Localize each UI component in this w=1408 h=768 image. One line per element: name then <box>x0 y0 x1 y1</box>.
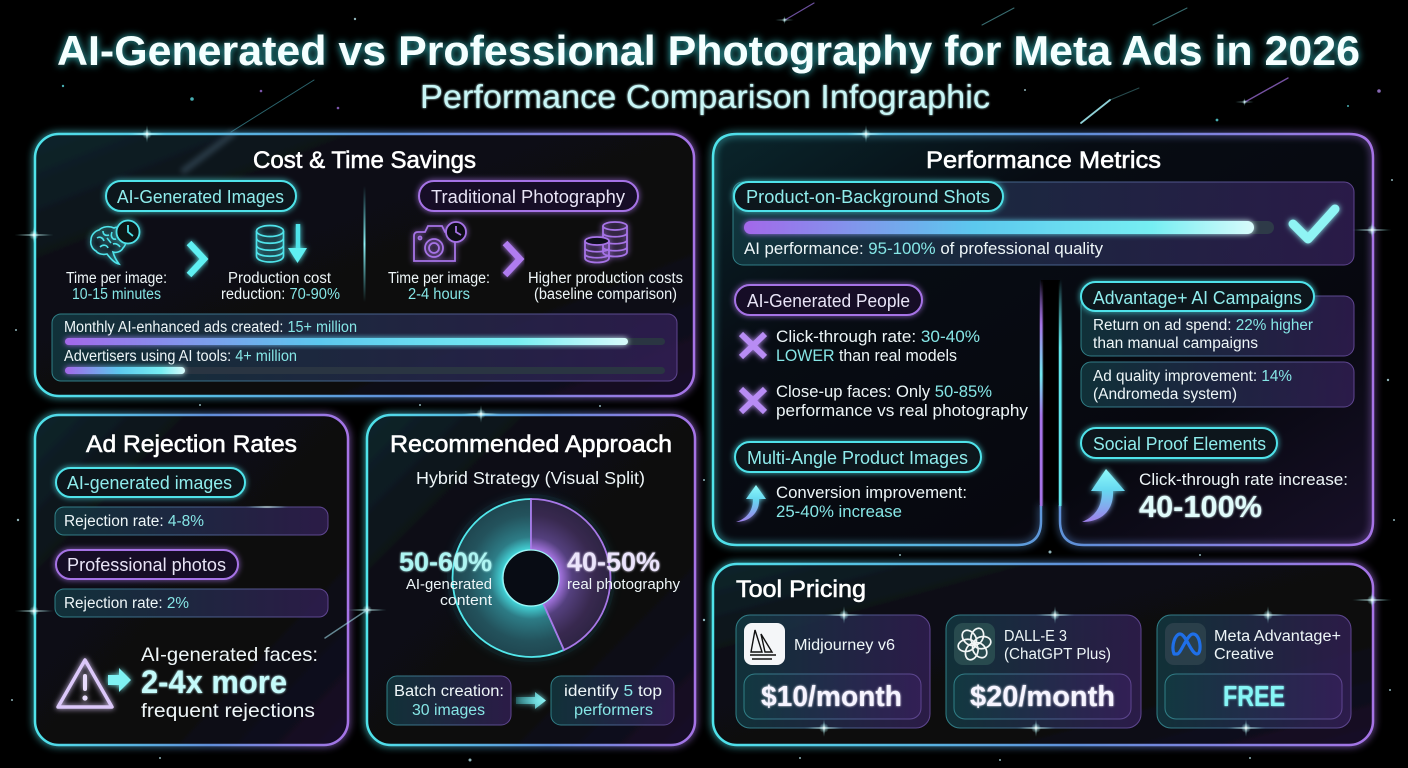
icon: upward curved arrow small <box>736 485 766 522</box>
pill: traditional photography: Traditional Photography <box>431 187 625 207</box>
box: return on ad spend: Return on ad spend: 22% higher <box>1093 317 1313 334</box>
pill: professional photos: Professional photos <box>67 555 226 575</box>
text: production cost reduction <box>221 270 340 303</box>
icon: coins with down arrow <box>256 224 307 263</box>
price: $10/month: $10/month <box>761 681 902 713</box>
pill: multi-angle product images <box>735 442 981 472</box>
text: DALL-E 3 name: DALL-E 3 <box>1004 628 1067 645</box>
bar: monthly ads <box>65 338 665 345</box>
arrow: warning to text <box>108 668 131 692</box>
box: AI rejection rate: Rejection rate: 4-8% <box>64 513 204 530</box>
icon: warning triangle <box>58 660 112 707</box>
heading: cost and time savings: Cost & Time Savings <box>253 147 476 174</box>
pill: AI-generated images <box>106 181 296 211</box>
card: Meta Advantage+ <box>1157 615 1351 728</box>
text: AI-generated faces callout: frequent rejections <box>141 700 315 722</box>
text: click-through rate increase: 40-100% <box>1139 489 1262 524</box>
box: return on ad spend <box>1081 296 1354 356</box>
label: 50-60% AI-generated: content <box>440 593 492 609</box>
heading: ad rejection rates: Ad Rejection Rates <box>86 431 297 458</box>
text: AI-generated faces callout: AI-generated faces: <box>141 644 318 666</box>
card: Midjourney <box>736 615 930 728</box>
text: traditional time per image: 2-4 hours <box>408 286 470 303</box>
box: return on ad spend: than manual campaigns <box>1093 335 1258 352</box>
box: professional rejection rate: Rejection rate: 2% <box>64 595 189 612</box>
pill: AI-generated people <box>735 285 922 315</box>
price: $20/month: $20/month <box>970 681 1115 713</box>
text: higher production costs: (baseline comparison) <box>534 286 677 303</box>
icon: check mark <box>1293 209 1335 239</box>
text: DALL-E 3 name: (ChatGPT Plus) <box>1004 646 1111 663</box>
text: conversion improvement: 25-40% increase <box>776 503 902 521</box>
text: click-through rate increase: Click-through rate increase: <box>1139 471 1348 489</box>
label: 50-60% AI-generated <box>399 547 492 609</box>
text: close-up faces <box>776 383 1029 420</box>
panel: ad rejection rates <box>35 415 348 745</box>
subtitle: Performance Comparison Infographic <box>420 78 990 115</box>
text: AI time per image: 10-15 minutes <box>72 286 161 303</box>
shooting star streaks <box>231 3 1288 132</box>
card: DALL-E 3 <box>946 615 1141 728</box>
pill: Advantage+ AI campaigns: Advantage+ AI Campaigns <box>1093 288 1302 308</box>
box: identify top performers <box>551 676 674 725</box>
chart: donut split <box>447 494 615 662</box>
pill: AI-generated images: AI-Generated Images <box>117 187 284 207</box>
box: batch creation <box>387 676 511 725</box>
text: close-up faces: performance vs real photography <box>776 402 1029 420</box>
panel: cost and time savings <box>35 132 694 396</box>
icon: coin stacks <box>585 222 627 262</box>
text: click-through rate <box>776 328 980 365</box>
pill: AI-generated images: AI-generated images <box>67 473 232 493</box>
text: higher production costs: Higher production costs <box>528 270 683 287</box>
box: AI rejection rate <box>55 507 328 535</box>
subheading: hybrid strategy: Hybrid Strategy (Visual Split) <box>416 468 645 488</box>
box: batch creation: 30 images <box>412 702 485 719</box>
pill: product-on-background shots <box>734 182 1003 211</box>
text: click-through rate: LOWER than real models <box>776 347 957 365</box>
label: 40-50% real photography: 40-50% <box>567 547 660 577</box>
pill: product-on-background shots: Product-on-Background Shots <box>746 187 990 207</box>
pill: social proof elements <box>1081 428 1277 458</box>
text: DALL-E 3 name <box>1004 628 1111 663</box>
price: $20/month <box>954 674 1131 719</box>
text: conversion improvement: Conversion improvement: <box>776 484 967 502</box>
icon: X mark one <box>741 334 765 357</box>
box: professional rejection rate <box>55 589 328 617</box>
text: advertisers: Advertisers using AI tools: 4+ million <box>64 348 297 365</box>
heading: recommended approach: Recommended Approach <box>390 431 672 458</box>
price: $10/month <box>744 674 921 719</box>
panel: recommended approach <box>367 415 695 745</box>
text: Meta Advantage+ name <box>1214 628 1341 663</box>
icon: X mark two <box>741 389 765 412</box>
box: ad quality improvement: (Andromeda system) <box>1093 386 1237 403</box>
text: traditional time per image: Time per image: <box>388 270 490 287</box>
diagonal streak over panels <box>325 610 367 638</box>
panel: performance metrics <box>713 134 1373 545</box>
box: product-on-background shots <box>733 182 1354 265</box>
heading: performance metrics: Performance Metrics <box>926 147 1161 174</box>
text: AI time per image: Time per image: <box>66 270 167 287</box>
box: ad quality improvement <box>1081 362 1354 407</box>
label: 40-50% real photography: real photography <box>567 577 681 593</box>
stats box with progress bars <box>52 314 677 381</box>
sparkle highlights <box>14 125 1392 737</box>
text: close-up faces: Close-up faces: Only 50-85% <box>776 383 992 401</box>
text: Meta Advantage+ name: Meta Advantage+ <box>1214 628 1341 645</box>
card: Midjourney: Midjourney v6 <box>794 637 895 654</box>
text: conversion improvement <box>776 484 967 521</box>
text: production cost reduction: Production cost <box>228 270 332 287</box>
title: AI-Generated vs Professional Photography for Meta Ads in 2026 <box>57 27 1360 74</box>
text: AI-generated faces callout <box>141 644 318 722</box>
pill: Advantage+ AI campaigns <box>1081 282 1314 311</box>
text: production cost reduction: reduction: 70-90% <box>221 286 340 303</box>
pill: AI-generated images <box>56 468 245 497</box>
box: identify top performers: identify 5 top <box>564 683 662 700</box>
box: identify top performers: performers <box>574 702 653 719</box>
text: AI time per image <box>66 270 167 303</box>
arrow: batch to performers <box>516 692 546 709</box>
pill: social proof elements: Social Proof Elements <box>1093 434 1266 454</box>
text: higher production costs <box>528 270 683 303</box>
text: click-through rate: Click-through rate: 30-40% <box>776 328 980 346</box>
pill: multi-angle product images: Multi-Angle Product Images <box>747 448 968 468</box>
icon: camera with clock <box>414 222 466 261</box>
heading: tool pricing: Tool Pricing <box>736 576 866 603</box>
text: AI-generated faces callout: 2-4x more <box>141 664 287 700</box>
bar: advertisers <box>65 367 665 374</box>
text: click-through rate increase <box>1139 471 1348 524</box>
label: 40-50% real photography <box>567 547 681 593</box>
pill: AI-generated people: AI-Generated People <box>747 291 910 311</box>
panel: tool pricing <box>713 564 1373 745</box>
text: AI performance: AI performance: 95-100% of professional quality <box>744 240 1104 258</box>
price: free: FREE <box>1223 681 1285 713</box>
text: Meta Advantage+ name: Creative <box>1214 646 1274 663</box>
arrow: purple chevron <box>505 243 520 275</box>
donut slice: real photography <box>531 499 610 650</box>
arrow: cyan chevron <box>189 243 204 275</box>
text: monthly ads: Monthly AI-enhanced ads created: 15+ million <box>64 319 357 336</box>
box: batch creation: Batch creation: <box>394 683 504 700</box>
text: traditional time per image <box>388 270 490 303</box>
label: 50-60% AI-generated: 50-60% <box>399 547 492 577</box>
pill: traditional photography <box>419 181 638 211</box>
icon: brain with clock <box>91 220 140 264</box>
box: ad quality improvement: Ad quality improvement: 14% <box>1093 368 1292 385</box>
icon: Midjourney sailboat <box>744 623 785 665</box>
donut slice: AI-generated <box>452 499 564 657</box>
icon: upward curved arrow large <box>1082 469 1125 522</box>
pill: professional photos <box>56 550 238 579</box>
label: 50-60% AI-generated: AI-generated <box>406 577 492 593</box>
icon: Meta logo <box>1165 623 1206 665</box>
icon: ChatGPT knot <box>954 623 995 665</box>
bar: AI performance <box>744 221 1274 234</box>
price: free <box>1165 674 1342 719</box>
